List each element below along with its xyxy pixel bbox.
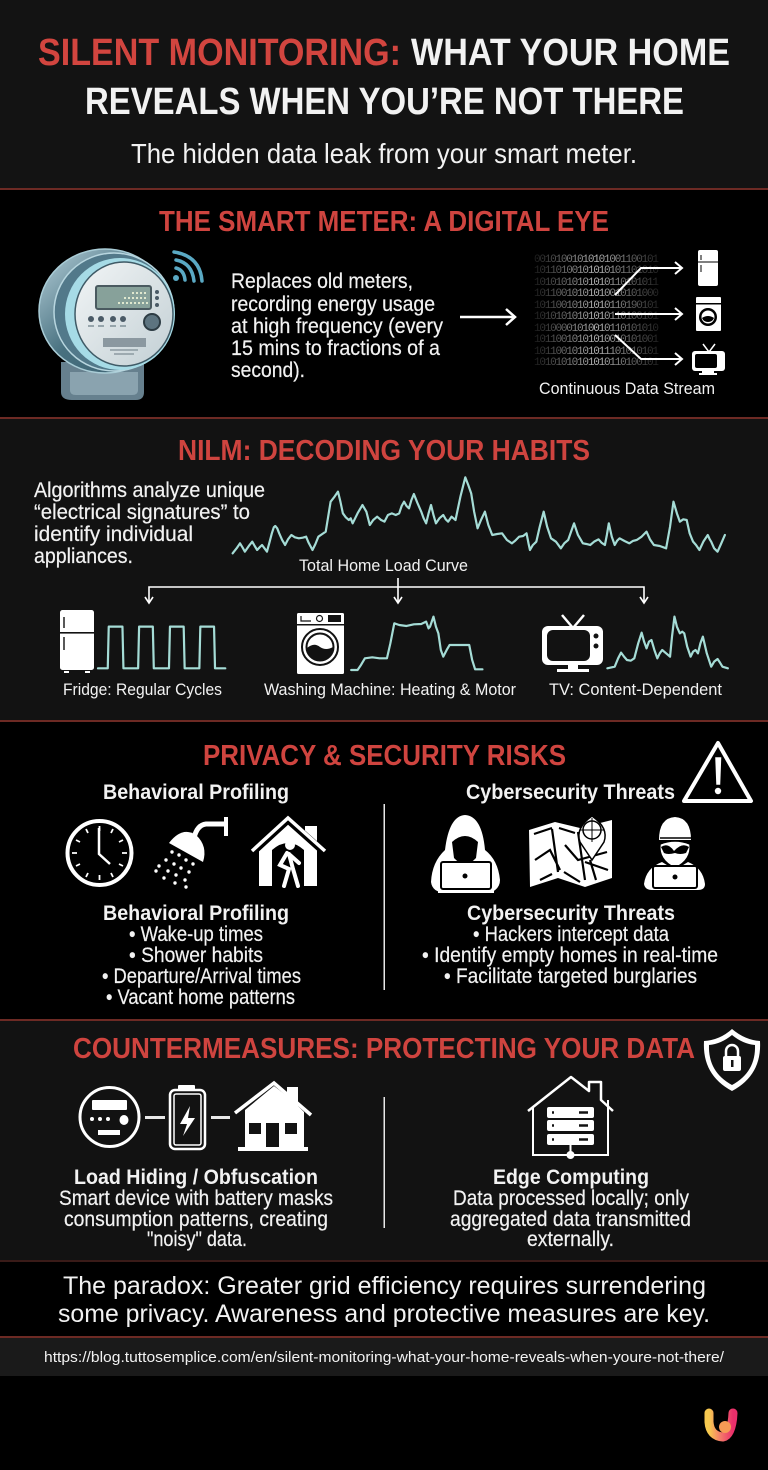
text: paradox line 2: some privacy. Awareness and protective measures are key. <box>58 1300 710 1328</box>
panel: source url footer <box>0 1338 768 1376</box>
text: edge computing <box>450 1166 691 1251</box>
text: edge computing: aggregated data transmitted <box>450 1207 691 1231</box>
icon: meter, battery and house chain <box>80 1083 311 1151</box>
text: load hiding: "noisy" data. <box>147 1227 247 1251</box>
heading: countermeasures: COUNTERMEASURES: PROTECTING YOUR DATA <box>73 1033 695 1065</box>
text: edge computing: Data processed locally; only <box>453 1186 689 1210</box>
text: cybersecurity threats list: Cybersecurity Threats <box>467 902 675 925</box>
text: meter description: at high frequency (every <box>231 314 443 338</box>
arrow: to data stream <box>460 309 515 325</box>
binary data stream: 10110010101010110190101 <box>534 300 659 312</box>
text: load hiding: consumption patterns, creating <box>64 1207 328 1231</box>
text: edge computing: Edge Computing <box>493 1166 649 1189</box>
text: NILM description: identify individual <box>34 522 193 546</box>
icon: tv <box>542 615 603 672</box>
text: meter description: 15 mins to fractions of a <box>231 336 440 360</box>
divider <box>384 1097 385 1228</box>
icon: hooded hacker <box>431 815 500 893</box>
arrows: load curve branches <box>145 578 648 603</box>
icon: small washer <box>696 297 721 331</box>
heading: privacy risks: PRIVACY & SECURITY RISKS <box>203 740 566 772</box>
icon: shield with lock <box>704 1029 760 1091</box>
text: behavioral profiling list: • Departure/Arrival times <box>102 964 301 988</box>
binary data stream <box>534 254 659 369</box>
icon: small fridge <box>698 250 718 286</box>
subheading: cybersecurity threats top: Cybersecurity Threats <box>466 781 675 804</box>
text: source url: https://blog.tuttosemplice.com/en/silent-monitoring-what-your-home-reveals-when-youre-not-there/ <box>44 1349 725 1366</box>
icon: smart meter device <box>39 249 175 400</box>
subheading: behavioral profiling top: Behavioral Profiling <box>103 781 289 804</box>
panel: paradox conclusion <box>0 1262 768 1338</box>
text: edge computing: externally. <box>527 1227 614 1251</box>
binary data stream: 10100001010010110101010 <box>534 323 659 335</box>
binary data stream: 10101010101010110100101 <box>534 311 659 323</box>
text: NILM description: Algorithms analyze unique <box>34 478 265 502</box>
panel: privacy and security risks <box>0 722 768 1021</box>
text: behavioral profiling list: Behavioral Profiling <box>103 902 289 925</box>
icon: small tv <box>692 344 725 375</box>
panel: NILM <box>0 419 768 722</box>
text: NILM description: appliances. <box>34 544 133 568</box>
binary data stream: 10101010101010110100101 <box>534 357 659 369</box>
title line 2: REVEALS WHEN YOU’RE NOT THERE <box>85 81 684 123</box>
label: washing machine: Washing Machine: Heating & Motor <box>264 680 516 699</box>
icon: house with walking person <box>252 818 325 886</box>
icon: fridge <box>60 610 94 673</box>
text: paradox line 1: The paradox: Greater grid efficiency requires surrendering <box>63 1272 706 1300</box>
text: behavioral profiling list <box>102 902 301 1009</box>
title line 1 red: SILENT MONITORING: <box>38 32 401 74</box>
divider <box>384 804 385 990</box>
chart: washing machine signature <box>351 617 482 670</box>
icon: warning triangle <box>684 743 751 801</box>
icon: washing machine <box>297 613 344 674</box>
binary data stream: 10110100101010101101010 <box>534 265 659 277</box>
chart: fridge signature <box>98 627 225 668</box>
binary data stream: 10110010101011101010101 <box>534 346 659 358</box>
label: fridge: Fridge: Regular Cycles <box>63 680 222 699</box>
text: cybersecurity threats list: • Hackers intercept data <box>473 922 669 946</box>
binary data stream: 10110010101010010101000 <box>534 288 659 300</box>
text: meter description: Replaces old meters, <box>231 269 413 293</box>
panel: title header <box>0 0 768 190</box>
text: cybersecurity threats list <box>422 902 718 988</box>
arrows: stream to appliances <box>615 262 682 365</box>
icon: shower <box>154 817 228 889</box>
text: NILM description: “electrical signatures” to <box>34 500 250 524</box>
text: NILM description <box>34 478 265 568</box>
icon: clock <box>68 821 132 885</box>
chart: tv signature <box>607 617 728 668</box>
text: cybersecurity threats list: • Facilitate targeted burglaries <box>444 964 697 988</box>
label: continuous data stream: Continuous Data Stream <box>539 379 715 398</box>
text: load hiding <box>59 1166 333 1251</box>
label: tv: TV: Content-Dependent <box>549 680 722 699</box>
title line 1 white: WHAT YOUR HOME <box>411 32 730 74</box>
panel: smart meter <box>0 190 768 419</box>
icon: map with target pin <box>529 816 612 887</box>
binary data stream: 10101010101010110101011 <box>534 277 659 289</box>
icon: wifi signal <box>173 252 202 281</box>
icon: brand logo <box>709 1413 733 1437</box>
text: meter description: recording energy usage <box>231 292 435 316</box>
panel: countermeasures <box>0 1021 768 1262</box>
icon: home server <box>528 1077 613 1159</box>
icon: burglar <box>644 817 705 890</box>
chart: total home load curve <box>233 477 725 553</box>
label: total home load curve: Total Home Load Curve <box>299 557 468 575</box>
text: load hiding: Smart device with battery masks <box>59 1186 333 1210</box>
heading: NILM: NILM: DECODING YOUR HABITS <box>178 435 590 467</box>
text: cybersecurity threats list: • Identify empty homes in real-time <box>422 943 718 967</box>
text: meter description <box>231 269 443 382</box>
binary data stream: 10110010101010010101001 <box>534 334 659 346</box>
text: meter description: second). <box>231 358 305 382</box>
text: load hiding: Load Hiding / Obfuscation <box>74 1166 318 1189</box>
text: behavioral profiling list: • Wake-up times <box>129 922 263 946</box>
text: behavioral profiling list: • Shower habits <box>129 943 263 967</box>
subtitle: The hidden data leak from your smart meter. <box>131 138 637 169</box>
text: behavioral profiling list: • Vacant home patterns <box>106 985 295 1009</box>
binary data stream: 00101001010101001100101 <box>534 254 659 266</box>
heading: smart meter: THE SMART METER: A DIGITAL EYE <box>159 206 609 238</box>
